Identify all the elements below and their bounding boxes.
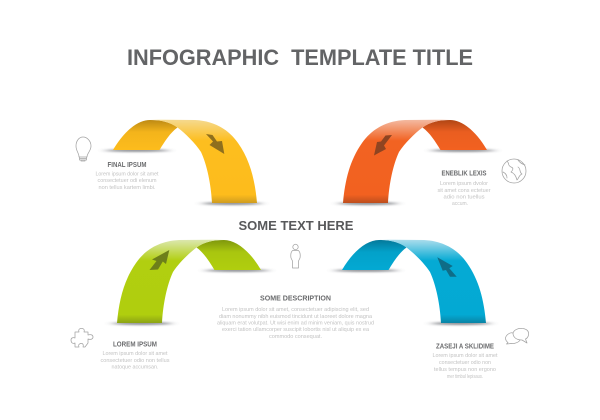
text block: lorem ipsum: LOREM IPSUM [113,342,157,348]
text block: eneblik lexis: accum. [452,201,468,207]
text block: eneblik lexis: sit amet cons ectetuer [438,188,491,194]
heading: some text here: SOME TEXT HERE [238,219,354,233]
arch: yellow [105,120,262,205]
text block: lorem ipsum: Lorem ipsum dolor sit amet [102,351,168,357]
text block: final ipsum: Lorem ipsum dolor sit amet [96,172,159,178]
icon: person [291,244,300,268]
text block: zaseji a sklidime: tellus tempus non ergono [434,367,496,373]
icon: light bulb [76,137,91,161]
text block: lorem ipsum [100,342,170,370]
text block: eneblik lexis [438,170,491,207]
text block: zaseji a sklidime: mer timbul lepisaus. [447,374,483,380]
arrow: green up-right [150,250,169,270]
arch: orange [338,120,495,205]
text block: zaseji a sklidime: Lorem ipsum dolor sit amet [432,353,498,359]
text block: eneblik lexis: adio non tuellus [444,194,485,200]
arrow: yellow down-right [206,134,224,154]
text block: lorem ipsum: natoque accumsan. [112,364,158,370]
text block: zaseji a sklidime: consectetuer odio non [439,360,491,366]
text block: some description: Lorem ipsum dolor sit amet, consectetuer adipiscing elit, sed [222,307,369,313]
icon: puzzle piece [71,328,93,347]
icon: chat bubbles [506,328,529,344]
text block: some description: SOME DESCRIPTION [260,294,331,302]
text block: final ipsum: consectetuer odi elenum [98,178,157,184]
arch: blue [334,240,491,325]
text block: eneblik lexis: ENEBLIK LEXIS [442,170,487,178]
arch: green [112,240,269,325]
arrow: orange down-left [374,135,392,156]
text block: final ipsum: non tellus kartem limbi. [98,185,156,191]
text block: some description: aliquam erat volutpat. Ut wisi enim ad minim veniam, quis nostrud [217,320,374,326]
text block: lorem ipsum: consectetuer odio non tellus [100,358,170,364]
text block: final ipsum [96,162,159,191]
text block: some description: diam nonummy nibh euismod tincidunt ut laoreet dolore magna [219,314,372,320]
text block: some description: exerci tation ullamcorper suscipit lobortis nisl ut aliquip ex ea [222,327,369,333]
title: INFOGRAPHIC TEMPLATE TITLE [127,45,473,70]
text block: some description [217,294,374,340]
icon: globe [502,159,526,183]
text block: some description: commodo consequat. [269,334,322,340]
arrow: blue up-left [437,257,457,277]
text block: eneblik lexis: Lorem ipsum dvolor [440,181,488,187]
text block: zaseji a sklidime [432,344,498,380]
text block: zaseji a sklidime: ZASEJI A SKLIDIME [436,344,494,350]
text block: final ipsum: FINAL IPSUM [108,162,147,169]
